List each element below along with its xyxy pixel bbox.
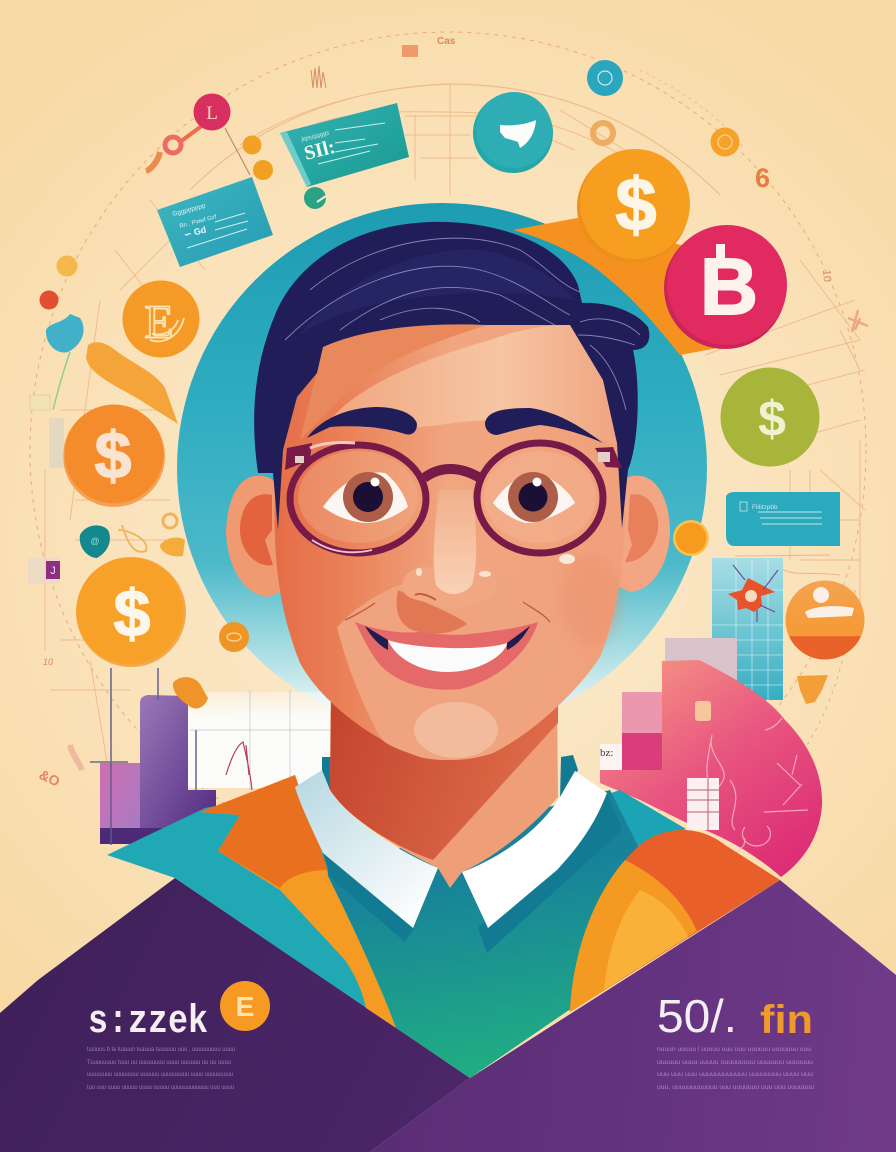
- right text block: uuu, uuuuuuuuuuuu uuu uuuuuuu uuu uuu uuuuuuu: [657, 1084, 814, 1091]
- purple square J icon: [28, 558, 60, 584]
- left bar chart with white backdrop: [90, 668, 330, 845]
- coin: red L with tail: L: [206, 103, 218, 124]
- lens area tint right: [484, 451, 596, 543]
- teal ticket three: Flilitzpbb: [752, 504, 778, 511]
- purple base right fold: [370, 880, 896, 1152]
- icon: orange gear sketch: [593, 123, 613, 143]
- right text block: uuu uuu uuu uuuuuuuuuuuu uuuuuuuu uuuu uuu: [657, 1071, 813, 1078]
- left text block: [87, 1046, 235, 1091]
- coin: euro orange: E: [144, 296, 174, 349]
- green coin: [304, 187, 326, 209]
- coin: pink bitcoin: B: [700, 242, 758, 331]
- jaw lighter plane: [337, 573, 590, 760]
- neck: [330, 695, 558, 888]
- teal blob coin: [80, 525, 110, 558]
- left ear: [226, 476, 285, 597]
- smile crease left: [345, 603, 375, 620]
- left text block: uuuuuuuu uuuuuuuu uuuuuu uuuuuuuuu uuuu uuuuuuuuu: [87, 1071, 233, 1078]
- green stem: [53, 352, 70, 410]
- face: [275, 324, 625, 760]
- orange ball fragment on chart: [173, 677, 208, 709]
- teal ticket three: [726, 492, 840, 546]
- hair: [254, 222, 649, 530]
- teal ticket two: Gggpppppp: [172, 202, 207, 218]
- coin: pink bitcoin: [664, 225, 787, 349]
- icon: red starburst: [728, 565, 778, 622]
- white window block: [687, 778, 719, 830]
- small coin lower left: [219, 622, 249, 652]
- number ten mark: 10: [820, 269, 833, 282]
- pale box: [30, 395, 50, 410]
- forehead shadow: [300, 324, 487, 440]
- small orange coin lower: [253, 160, 273, 180]
- glasses: [285, 443, 622, 553]
- right text block: uuuuuu uuuu uuuuu uuuuuuuuu uuuuuuu uuuuuuu: [657, 1059, 813, 1066]
- forehead highlight: [330, 325, 617, 445]
- teal portrait circle: [177, 203, 707, 733]
- heading right number: 50/.: [657, 990, 737, 1042]
- icon: blue splash: [46, 314, 84, 353]
- left text block: tuu uuu uuuu uuuuu uuuu uuuuu uuuuuuuuuuuu uuu uuuu: [87, 1084, 234, 1091]
- sketch mark right: [848, 310, 868, 332]
- coin: red L with tail: [146, 94, 230, 171]
- teal ticket one: SIl:: [302, 136, 337, 165]
- small pale ring sketches: [118, 514, 177, 552]
- orange swoosh behind coins: [513, 218, 723, 355]
- heading right word: fin: [760, 998, 813, 1042]
- orange leaf shape: [86, 342, 178, 424]
- coin: large orange dollar: [63, 404, 165, 507]
- right ear: [615, 476, 670, 592]
- collar right: [462, 771, 607, 928]
- teal ticket two: ∽ Gd: [183, 224, 207, 240]
- coin: small red left: [40, 290, 58, 310]
- nose shadow: [397, 590, 467, 634]
- digit six: 6: [755, 163, 770, 193]
- right text block: nuuun uuuuu l uuuuu uuu uuu uuuuuu uuuuuuu uuu: [657, 1046, 811, 1053]
- lens area tint left: [298, 451, 418, 543]
- scribble bottom left: [37, 745, 82, 790]
- coin: top teal with white bird: [473, 92, 553, 173]
- top label: Cas: [437, 36, 456, 47]
- coin: orange dollar: [577, 149, 690, 263]
- coin: small orange right: [710, 128, 740, 156]
- top label: [402, 36, 456, 57]
- coin: euro orange: [122, 280, 200, 358]
- chin highlight: [414, 702, 498, 758]
- left text block: tusiuus b la tuauun tuauua tsuuuuu uuu , uuuuuuuuu uuuu: [87, 1046, 235, 1053]
- mouth: [355, 622, 538, 690]
- right eye: [493, 472, 575, 523]
- teal ticket two: [157, 177, 273, 267]
- purple base: [0, 878, 470, 1152]
- teal ticket one: jigsyggggs: [300, 130, 330, 143]
- small orange droplet: [160, 538, 185, 556]
- collar backing band right: [478, 755, 622, 953]
- number ten on left: 10: [43, 657, 53, 667]
- pink building collage: [600, 558, 822, 877]
- shirt body: [328, 790, 640, 1078]
- teal blob coin: @: [90, 536, 100, 546]
- nose: [402, 486, 497, 610]
- teal ticket two: Rn . Pwwf Gzf: [179, 214, 218, 230]
- left jacket teal: [107, 790, 396, 1028]
- coin: green dollar: [720, 368, 820, 466]
- small tag on collage: [695, 701, 711, 721]
- collar backing band left: [322, 757, 414, 942]
- left eye: [323, 472, 408, 523]
- icon: orange E coin: E: [236, 991, 254, 1022]
- left orange lapel: [200, 775, 396, 1028]
- smile crease right: [523, 602, 550, 622]
- left eyebrow: [307, 407, 417, 438]
- pale tower: [49, 418, 64, 468]
- right text block: [657, 1046, 814, 1091]
- icon: orange E coin: [220, 981, 270, 1031]
- coin: small teal top right: [587, 60, 623, 96]
- orange small tag: [797, 675, 828, 704]
- purple square J icon: J: [50, 565, 56, 577]
- teal tiled tower: [712, 558, 783, 700]
- title left: s:zzek: [88, 1000, 208, 1045]
- small orange coin top: [242, 136, 262, 154]
- small sketch bars at top: [311, 66, 326, 88]
- right jacket teal: [500, 790, 686, 1020]
- coin: lower orange dollar: [76, 557, 186, 667]
- orange ball icon: [786, 580, 864, 660]
- right jacket orange panel: [570, 830, 780, 1012]
- coin: orange dollar: $: [615, 163, 657, 246]
- right eyebrow: [485, 408, 603, 443]
- connectors between L coin and small coins: [225, 128, 250, 175]
- coin: small yellow left: [56, 256, 78, 276]
- cheek shine: [559, 554, 575, 564]
- coin: small orange on right of ear: [673, 520, 709, 556]
- cheek blush right: [560, 555, 620, 645]
- grid arcs and measurement lines: [30, 32, 866, 868]
- teal ticket one: [280, 103, 409, 187]
- coin: lower orange dollar: $: [114, 576, 150, 650]
- collar left: [295, 770, 438, 928]
- scribble bottom left: &O: [37, 766, 63, 790]
- coin: green dollar: $: [758, 391, 786, 447]
- left text block: Tuuuuuuuu tuuu uu uuuuuuuu uuuu uuuuuu uu uu uuuu: [87, 1059, 231, 1066]
- note glyphs on white block: bz:: [600, 747, 613, 759]
- coin: large orange dollar: $: [95, 418, 131, 492]
